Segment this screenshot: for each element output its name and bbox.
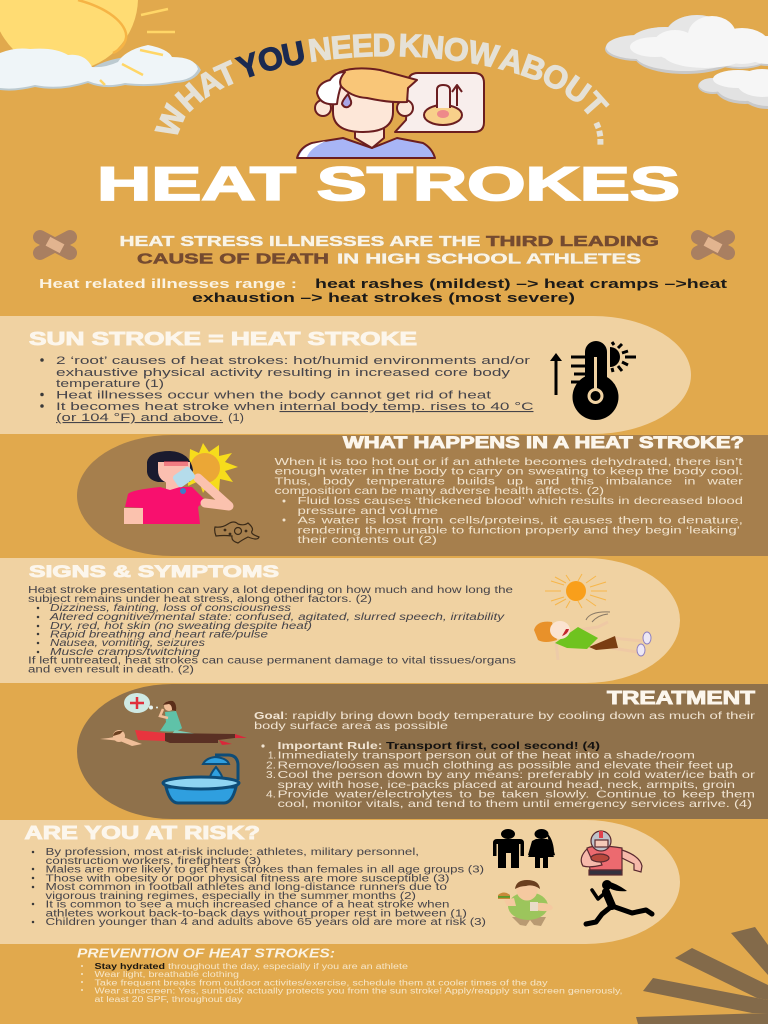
text block: Thus, body temperature builds up and this imbalance in water <box>274 476 744 488</box>
icon: sun rays corner <box>636 927 768 1024</box>
text block: 2. <box>266 760 276 772</box>
text block: Cool the person down by any means: preferably in cold water/ice bath or <box>278 770 756 781</box>
text block: If left untreated, heat strokes can cause permanent damage to vital tissues/organs <box>28 656 516 666</box>
icon: runner silhouette <box>586 880 652 924</box>
bullet list: temperature (1) <box>56 378 164 390</box>
icon: thermometer with sun and arrow <box>550 341 636 420</box>
bullet list: By profession, most at-risk include: athletes, military personnel, <box>46 847 419 858</box>
text block: Muscle cramps/twitching <box>50 647 201 658</box>
bullet list: (or 104 °F) and above. <box>56 412 223 424</box>
subheading: third leading cause of death: IN HIGH SCHOOL ATHLETES <box>337 252 641 268</box>
bullet list: It becomes heat stroke when <box>56 401 275 413</box>
heading: ARE YOU AT RISK? <box>24 823 260 843</box>
bullet list: Males are more likely to get heat strokes than females in all age groups (3) <box>46 864 484 876</box>
text block: Goal <box>254 711 284 722</box>
text block: enough water in the body to carry on sweating to keep the body cool. <box>274 466 743 478</box>
text block: : rapidly bring down body temperature by cooling down as much of their <box>284 711 756 722</box>
subheading: third leading cause of death: THIRD LEADING <box>486 234 659 250</box>
bullet list: Most common in football athletes and long-distance runners due to <box>46 882 448 893</box>
text block: Fluid loss causes ‘thickened blood’ which results in decreased blood <box>298 496 743 507</box>
heading: SIGNS & SYMPTOMS <box>29 562 279 581</box>
text block: 4. <box>266 790 276 800</box>
text block: Altered cognitive/mental state: confused, agitated, slurred speech, irritability <box>49 612 505 623</box>
bullet list: Those with obesity or poor physical fitness are more susceptible (3) <box>46 874 450 884</box>
icon: football player <box>581 831 642 875</box>
heading: TREATMENT <box>607 688 755 708</box>
subheading: third leading cause of death: CAUSE OF DEATH <box>137 252 329 268</box>
icon: clouds top right <box>605 15 768 109</box>
text block: When it is too hot out or if an athlete becomes dehydrated, there isn’t <box>274 457 743 468</box>
subheading: third leading cause of death <box>120 234 659 268</box>
icon: dehydrated girl drinking under sun <box>124 443 238 524</box>
bullet list: exhaustive physical activity resulting in increased core body <box>56 367 511 379</box>
icon: sun with rays and cloud <box>0 0 201 91</box>
icon: germ <box>215 522 259 543</box>
title: HEAT STROKES <box>97 157 680 210</box>
text block: 3. <box>266 770 276 781</box>
text block: spray with hose, ice-packs placed at around head, neck, armpits, groin <box>278 780 735 791</box>
bullet list: It is common to see a much increased chance of a heat stroke when <box>46 900 450 910</box>
text block: prevention list: throughout the day, especially if you are an athlete <box>168 962 409 971</box>
text block: As water is lost from cells/proteins, it causes them to denature, <box>298 516 743 526</box>
text block: Provide water/electrolytes to be taken slowly. Continue to keep them <box>278 790 755 800</box>
text block: Nausea, vomiting, seizures <box>50 638 205 649</box>
text block: body surface area as possible <box>254 721 448 732</box>
icon: sweating person with thermometer bubble <box>297 68 484 158</box>
text block: prevention list: at least 20 SPF, throughout day <box>94 995 242 1004</box>
heading: SUN STROKE = HEAT STROKE <box>29 329 417 349</box>
text block: cool, monitor vitals, and tend to them until emergency services arrive. (4) <box>278 799 752 810</box>
icon: small sun <box>545 574 607 608</box>
text block <box>28 585 516 676</box>
text block: 1. <box>268 750 276 762</box>
text: heat related illnesses range: heat rashes (mildest) –> heat cramps –>heat <box>315 277 728 291</box>
bullet list: athletes workout back-to-back days without proper rest in between (1) <box>46 908 467 920</box>
text block: subject remains under heat stress, along other factors. (2) <box>28 594 372 605</box>
text block: composition can be many adverse health affects. (2) <box>274 486 604 497</box>
text block: Dizziness, fainting, loss of consciousness <box>50 603 291 614</box>
icon: man and woman <box>493 829 555 868</box>
panel: signs and symptoms <box>0 558 680 683</box>
text block: prevention list <box>82 962 622 1004</box>
text block: Transport first, cool second! (4) <box>386 741 600 752</box>
icon: bathtub and shower <box>163 755 239 803</box>
icon: fainted boy <box>534 612 651 660</box>
subheading: third leading cause of death: HEAT STRESS ILLNESSES ARE THE <box>120 234 481 250</box>
icon: bandage left <box>31 228 79 262</box>
bullet list: Children younger than 4 and adults above 65 years old are more at risk (3) <box>46 917 486 928</box>
bullet list: internal body temp. rises to 40 °C <box>280 401 534 413</box>
text block: prevention list: Stay hydrated <box>94 962 165 971</box>
text block: Remove/loosen as much clothing as possible and elevate their feet up <box>278 760 733 772</box>
bullet list: (1) <box>228 412 244 424</box>
bullet list: construction workers, firefighters (3) <box>46 856 261 867</box>
bullet list <box>33 847 486 928</box>
text: heat related illnesses range <box>39 277 728 305</box>
text block: prevention list: Take frequent breaks from outdoor activites/exercise, schedule them at cooler times of the day <box>94 978 548 988</box>
text block: Rapid breathing and heart rate/pulse <box>50 630 269 640</box>
panel: sun stroke = heat stroke <box>0 316 691 434</box>
text block: Important Rule: <box>278 741 382 752</box>
text block: pressure and volume <box>298 506 438 517</box>
bullet list <box>42 355 534 424</box>
text block: their contents out (2) <box>298 535 437 546</box>
icon: bandage right <box>689 228 737 262</box>
bullet list: 2 ‘root’ causes of heat strokes: hot/humid environments and/or <box>56 355 531 367</box>
text block: Immediately transport person out of the heat into a shade/room <box>278 750 695 762</box>
icon: rescuer with collapsed person <box>100 693 247 746</box>
heading: prevention of heat strokes: PREVENTION OF HEAT STROKES: <box>77 946 335 960</box>
text block <box>254 711 756 810</box>
text block: prevention list: Wear sunscreen: Yes, sunblock actually protects you from the sun stroke! Apply/reapply sun screen generously, <box>94 986 622 996</box>
heading: WHAT HAPPENS IN A HEAT STROKE? <box>343 433 744 452</box>
text block: rendering them unable to function properly and they begin ‘leaking’ <box>298 526 740 536</box>
bullet list: vigorous training regimes, especially in the summer months (2) <box>46 891 416 902</box>
panel: treatment <box>77 684 768 819</box>
panel: are you at risk <box>0 820 680 944</box>
icon: overweight person eating <box>498 880 553 926</box>
text: heat related illnesses range: Heat related illnesses range : <box>39 277 297 291</box>
heading: what you need know about (arc): WHAT YOU NEED KNOW ABOUT ... <box>154 34 610 145</box>
text block: Dry, red, hot skin (no sweating despite heat) <box>50 621 312 632</box>
text: heat related illnesses range: exhaustion –> heat strokes (most severe) <box>192 291 575 305</box>
bullet list: Heat illnesses occur when the body cannot get rid of heat <box>56 390 491 402</box>
text block: Heat stroke presentation can vary a lot depending on how much and how long the <box>28 585 514 596</box>
panel: what happens in a heat stroke <box>77 433 768 556</box>
text block: prevention list: Wear light, breathable clothing <box>94 970 239 979</box>
text block <box>274 457 744 546</box>
text block: and even result in death. (2) <box>28 664 194 676</box>
